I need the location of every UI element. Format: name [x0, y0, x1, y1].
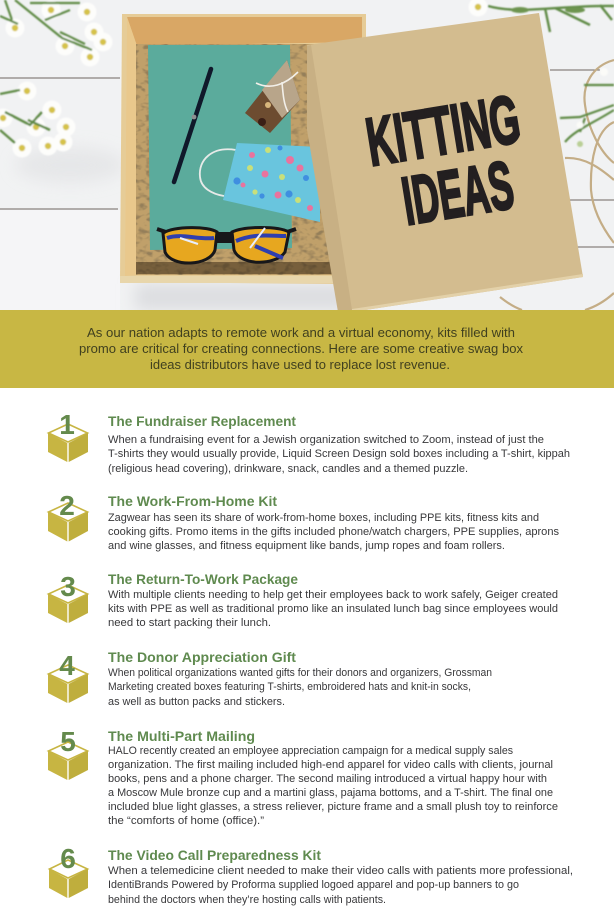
- item 5: The Multi-Part Mailing: [48, 726, 558, 827]
- item 4: The Donor Appreciation Gift: [48, 649, 492, 708]
- body text: a Moscow Mule bronze cup and a martini glass, pajama bottoms, and a T-shirt. The final one: [108, 787, 553, 799]
- blue-light glasses: [157, 228, 296, 263]
- body text: When a fundraising event for a Jewish organization switched to Zoom, instead of just the: [108, 434, 544, 446]
- item 6: The Video Call Preparedness Kit: [49, 843, 573, 906]
- body text: HALO recently created an employee appreciation campaign for a medical supply sales: [108, 745, 513, 757]
- icon: numbered box 1: 1: [59, 409, 75, 440]
- body text: Marketing created boxes featuring T-shirts, embroidered hats and knit-in socks,: [108, 681, 471, 693]
- body text: books, pens and a phone charger. The second mailing introduced a virtual happy hour with: [108, 773, 547, 785]
- body text: (religious head covering), drinkware, snack, candles and a themed puzzle.: [108, 463, 468, 475]
- icon: numbered box 2: 2: [59, 490, 75, 521]
- flowers: top left: [0, 0, 112, 66]
- icon: numbered box 3: [48, 571, 88, 623]
- icon: numbered box 4: 4: [59, 650, 75, 681]
- body text: as well as button packs and stickers.: [108, 696, 285, 708]
- body text: When political organizations wanted gifts for their donors and organizers, Grossman: [108, 667, 492, 679]
- granola bar: [245, 60, 300, 133]
- body text: [108, 589, 558, 629]
- pen: [174, 69, 211, 182]
- flowers: right side: [560, 68, 614, 147]
- heading: The Video Call Preparedness Kit: [108, 847, 321, 863]
- open box: [120, 14, 366, 284]
- body text: IdentiBrands Powered by Proforma supplied logoed apparel and pop-up banners to go: [108, 879, 519, 891]
- body text: When a telemedicine client needed to make their video calls with patients more professional,: [108, 865, 573, 877]
- item 3: The Return-To-Work Package: [48, 571, 558, 629]
- icon: numbered box 5: 5: [60, 726, 76, 757]
- heading: The Work-From-Home Kit: [108, 493, 277, 509]
- intro text: promo are critical for creating connections. Here are some creative swag box: [79, 342, 524, 356]
- body text: With multiple clients needing to help get their employees back to work safely, Geiger created: [108, 589, 558, 601]
- body text: need to start packing their lunch.: [108, 617, 271, 629]
- intro text: As our nation adapts to remote work and a virtual economy, kits filled with: [87, 326, 515, 340]
- icon: numbered box 6: [49, 843, 88, 898]
- body text: [108, 865, 573, 906]
- intro text: [79, 326, 524, 372]
- body text: cooking gifts. Promo items in the gifts included phone/watch chargers, PPE supplies, aprons: [108, 526, 559, 538]
- body text: included blue light glasses, a stress reliever, picture frame and a small plush toy to reinforce: [108, 801, 558, 813]
- icon: numbered box 5: [48, 726, 88, 780]
- heading: The Fundraiser Replacement: [108, 413, 296, 429]
- icon: numbered box 6: 6: [60, 843, 76, 874]
- floral face mask: [200, 143, 320, 222]
- body text: [108, 434, 570, 475]
- icon: numbered box 3: 3: [60, 571, 76, 602]
- item 1: The Fundraiser Replacement: [48, 409, 570, 475]
- body text: kits with PPE as well as traditional promo like an insulated lunch bag since employees would: [108, 603, 558, 615]
- flowers: top right: [468, 0, 614, 32]
- body text: Zagwear has seen its share of work-from-home boxes, including PPE kits, fitness kits and: [108, 512, 539, 524]
- body text: the “comforts of home (office).”: [108, 815, 264, 827]
- paper shred filling: [136, 44, 346, 275]
- rope: [500, 60, 614, 310]
- heading: The Return-To-Work Package: [108, 571, 298, 587]
- flowers: left: [0, 82, 76, 158]
- shadow under box: [135, 284, 350, 310]
- heading: The Donor Appreciation Gift: [108, 649, 296, 665]
- lid title: KITTING IDEAS: [361, 81, 535, 244]
- teal notebook: [148, 45, 292, 250]
- intro text: ideas distributors have used to replace lost revenue.: [150, 358, 450, 372]
- intro banner: [0, 310, 614, 388]
- heading: The Multi-Part Mailing: [108, 728, 255, 744]
- body text: behind the doctors when they’re hosting calls with patients.: [108, 894, 386, 906]
- hero photo: gift box on wooden table: [0, 0, 614, 312]
- icon: numbered box 1: [48, 409, 88, 462]
- icon: numbered box 4: [48, 650, 88, 703]
- item 2: The Work-From-Home Kit: [48, 490, 559, 552]
- body text: [108, 667, 492, 708]
- body text: and wine glasses, and fitness equipment like bands, jump ropes and foam rollers.: [108, 540, 505, 552]
- body text: [108, 745, 558, 827]
- icon: numbered box 2: [48, 490, 88, 542]
- body text: [108, 512, 559, 552]
- body text: organization. The first mailing included high-end apparel for video calls with clients, journal: [108, 759, 553, 771]
- box lid with title: [307, 13, 583, 312]
- wood table: [0, 0, 614, 310]
- body text: T-shirts they would usually provide, Liquid Screen Design sold boxes including a T-shirt, kippah: [108, 448, 570, 460]
- lid title: KITTING IDEAS: IDEAS: [397, 147, 519, 240]
